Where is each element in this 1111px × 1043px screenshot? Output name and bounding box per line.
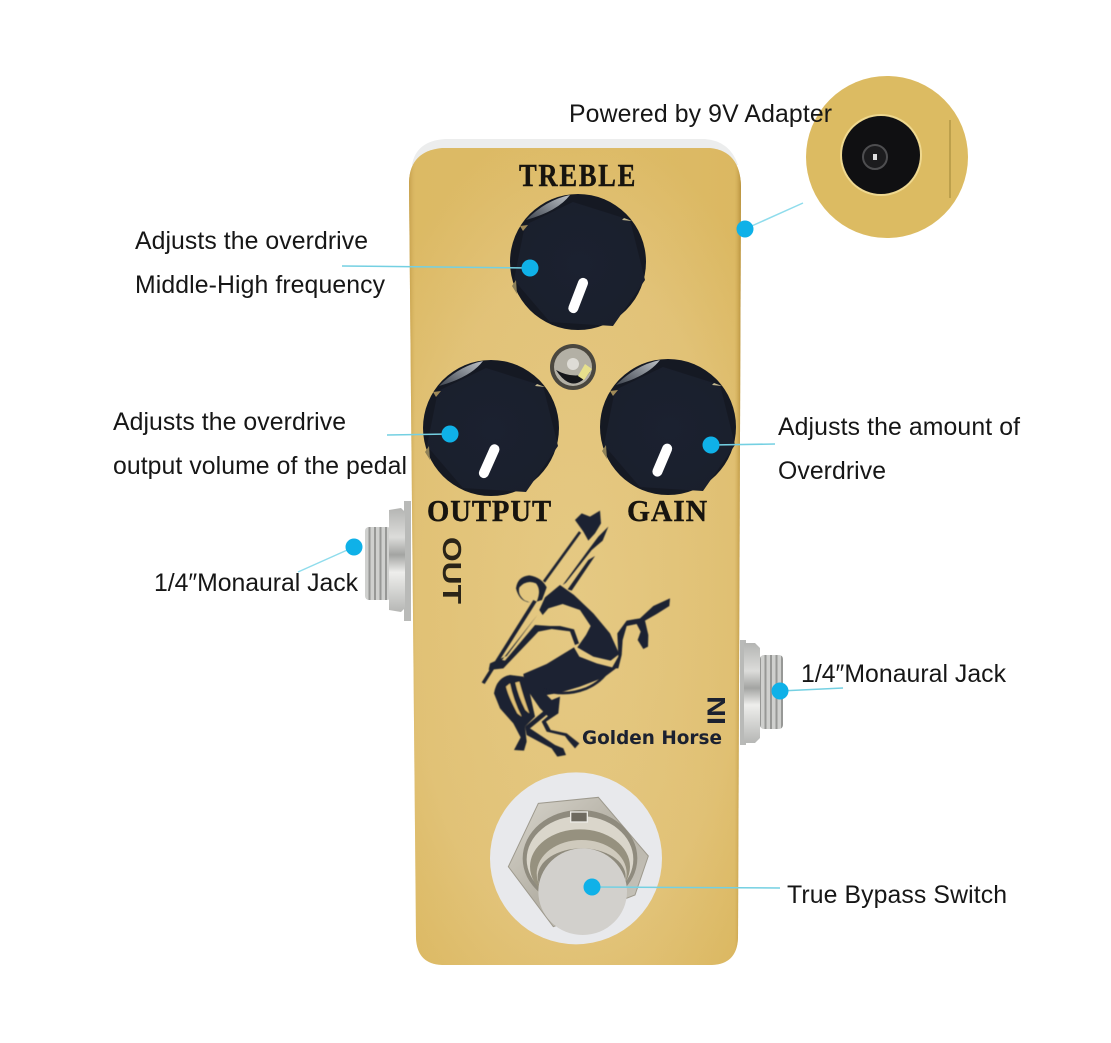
callout: power: Powered by 9V Adapter: [569, 101, 832, 128]
switch collar: [523, 810, 637, 907]
switch surround: [490, 772, 662, 944]
callout: left jack: 1/4″Monaural Jack: [154, 570, 359, 597]
label: OUTPUT: OUTPUT: [427, 493, 552, 528]
callout: output: output volume of the pedal: [113, 453, 407, 480]
callout: right jack: [772, 661, 1007, 700]
callout: gain: Adjusts the amount of: [778, 414, 1020, 441]
logo text: Golden Horse: Golden Horse: [582, 727, 722, 749]
tail: [494, 675, 535, 751]
seam line: [949, 120, 951, 198]
label: OUT jack: OUT: [437, 537, 467, 604]
slot: [571, 812, 587, 822]
callout: footswitch: True Bypass Switch: [787, 882, 1007, 909]
callout: output: [113, 409, 458, 480]
callout: right jack: 1/4″Monaural Jack: [801, 661, 1007, 688]
hex nut: [508, 797, 648, 927]
inset: power jack detail: [806, 76, 968, 238]
inset gold disc: [806, 76, 968, 238]
callout: gain: Overdrive: [778, 458, 886, 485]
LED: [550, 344, 596, 390]
front leg: [612, 598, 670, 668]
callout: output: Adjusts the overdrive: [113, 409, 346, 436]
callout: footswitch: [584, 878, 1007, 909]
callout: treble: Adjusts the overdrive: [135, 228, 368, 255]
panel: product photo of pedal: [365, 139, 783, 965]
lower arm: [489, 615, 579, 670]
power socket: [840, 114, 922, 196]
button cap: [538, 848, 627, 935]
knob: treble: [510, 194, 646, 330]
axe head: [575, 511, 601, 541]
axe shaft: [544, 532, 580, 582]
footswitch: [490, 772, 662, 944]
horse body: [523, 647, 616, 717]
label: TREBLE: TREBLE: [519, 157, 637, 193]
raised arm: [563, 527, 608, 585]
hind legs: [525, 710, 566, 757]
callout: gain: [702, 414, 1020, 485]
spear: [482, 600, 537, 684]
body edge shading: [409, 148, 741, 965]
head: [516, 575, 547, 602]
left output jack: [365, 501, 411, 621]
pedal body: [409, 148, 741, 965]
torso: [539, 585, 619, 661]
knob: output: [423, 360, 559, 496]
callout: treble: Middle-High frequency: [135, 272, 386, 299]
pedal top edge shadow: [412, 139, 738, 165]
callout: left jack: [154, 538, 362, 597]
logo: centaur: [482, 511, 670, 757]
callout: treble: [135, 228, 538, 299]
right input jack: [740, 640, 783, 745]
knob: gain: [600, 359, 736, 495]
belly line: [543, 670, 608, 693]
callout: power: [569, 101, 832, 238]
label: IN jack: IN: [703, 696, 731, 725]
label: GAIN: GAIN: [627, 493, 708, 528]
